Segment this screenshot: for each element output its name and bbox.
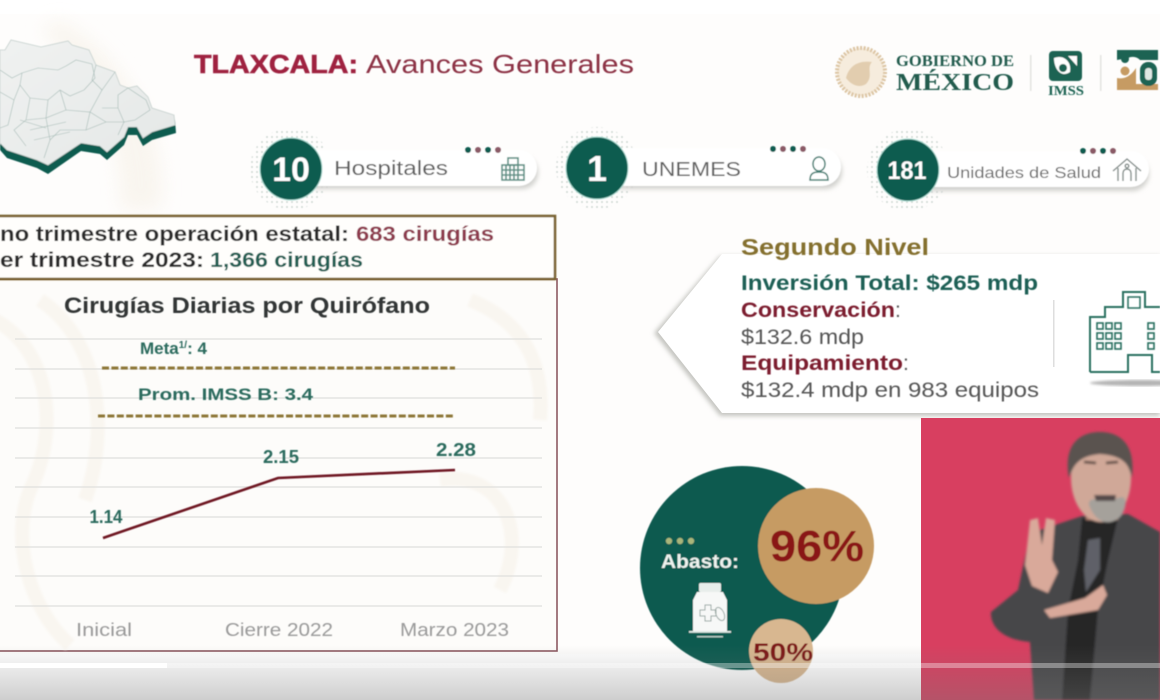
stat pill: 181 unidades de salud	[867, 129, 1149, 211]
callout: quarter surgeries: er trimestre 2023:	[0, 249, 204, 272]
logo: 80 años	[1100, 50, 1158, 91]
text block: investment: Conservación	[741, 299, 895, 322]
stat: 96 percent	[758, 488, 874, 604]
callout: quarter surgeries: no trimestre operación estatal:	[0, 223, 349, 246]
abasto label: Abasto:	[661, 552, 739, 573]
target line: meta	[102, 339, 455, 368]
logo: IMSS: IMSS	[1048, 84, 1084, 99]
axis labels: Marzo 2023	[400, 620, 509, 640]
video player bar	[0, 645, 1160, 700]
title	[194, 49, 634, 79]
icon: doctor	[810, 157, 828, 180]
target line: meta: Meta	[140, 339, 179, 358]
target line: meta: : 4	[187, 339, 207, 358]
line chart: 2.28	[436, 440, 476, 460]
text block: investment: :	[895, 299, 901, 322]
icon: house	[1113, 159, 1141, 181]
callout: quarter surgeries: 683 cirugías	[356, 223, 494, 246]
stat pill: 10 hospitales: Hospitales	[334, 158, 448, 180]
stat pill: 1 UNEMES	[556, 127, 842, 209]
stat pill: 10 hospitales: 10	[272, 151, 310, 189]
stat: 50 percent: 50%	[753, 639, 813, 667]
panel: surgeries chart	[0, 216, 557, 651]
heading: Segundo Nivel	[741, 234, 929, 260]
stat pill: 1 UNEMES: UNEMES	[642, 159, 741, 181]
text block: investment: $132.6 mdp	[741, 326, 864, 349]
text block: investment: Inversión Total: $265 mdp	[741, 271, 1038, 295]
axis labels: Inicial	[76, 620, 132, 640]
callout: quarter surgeries	[0, 216, 555, 279]
callout: quarter surgeries: 1,366 cirugías	[210, 249, 363, 272]
map of Tlaxcala	[0, 40, 176, 174]
logo: IMSS	[1030, 51, 1084, 99]
target line: meta: 1/	[179, 340, 187, 351]
interpreter figure	[991, 432, 1160, 700]
stat pill: 181 unidades de salud: 181	[888, 157, 927, 185]
stat pill: 10 hospitales	[250, 128, 538, 210]
axis labels: Cierre 2022	[225, 620, 333, 640]
text block: investment: Equipamiento	[741, 352, 903, 375]
axis labels	[76, 620, 509, 640]
text block: investment	[741, 271, 1039, 402]
line chart	[90, 440, 476, 538]
chart title: Cirugías Diarias por Quirófano	[64, 293, 430, 318]
title: TLAXCALA:	[194, 49, 358, 79]
chart: abasto circles	[640, 466, 874, 683]
line chart: 2.15	[263, 447, 299, 467]
line chart: 1.14	[90, 507, 122, 527]
stat pill: 181 unidades de salud: Unidades de Salud	[947, 165, 1101, 182]
stat: 50 percent	[749, 619, 813, 683]
text block: investment: :	[903, 352, 909, 375]
abasto label	[661, 538, 739, 573]
panel: sign language interpreter	[921, 418, 1160, 700]
stat: 96 percent: 96%	[770, 522, 864, 571]
logo: Gobierno de México	[837, 48, 1014, 96]
title: Avances Generales	[366, 49, 634, 79]
logo: Gobierno de México: GOBIERNO DE	[896, 53, 1014, 70]
text block: investment: $132.4 mdp en 983 equipos	[741, 379, 1039, 402]
target line: IMSS B average: Prom. IMSS B: 3.4	[138, 385, 314, 404]
icon: hospital building	[1090, 292, 1160, 372]
icon: hospital	[502, 158, 524, 180]
icon: national emblem	[837, 48, 885, 96]
icon: medicine bottle	[689, 583, 731, 637]
logo: Gobierno de México: MÉXICO	[896, 70, 1014, 96]
stat pill: 1 UNEMES: 1	[587, 148, 607, 189]
panel: segundo nivel	[654, 234, 1160, 416]
